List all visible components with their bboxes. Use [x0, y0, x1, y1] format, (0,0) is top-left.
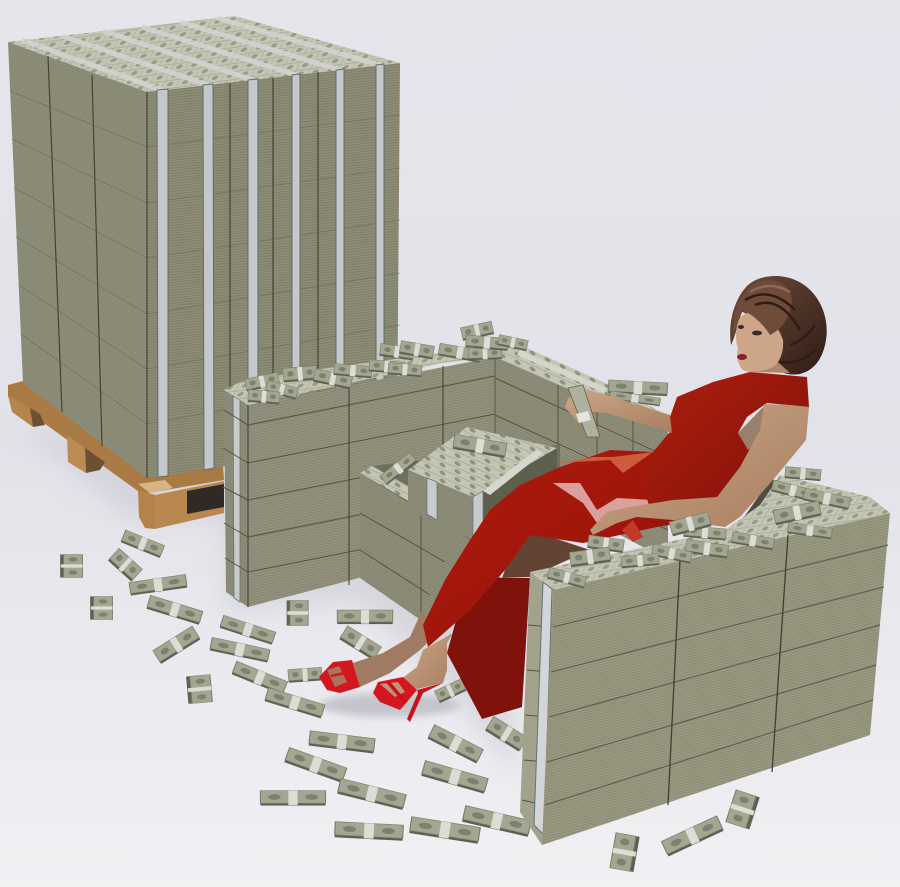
money piles on back wall	[244, 321, 668, 406]
near leg	[400, 633, 453, 690]
wall end face with strap	[224, 390, 248, 607]
torso	[640, 372, 809, 527]
near upper arm and forearm	[590, 404, 809, 535]
cube top	[8, 16, 400, 92]
left chair wall	[223, 345, 672, 607]
shoe shadows	[320, 693, 460, 717]
far arm	[565, 390, 672, 433]
neck	[750, 355, 790, 373]
floor shadows	[20, 425, 520, 780]
cube left face	[8, 42, 147, 478]
wooden pallet	[8, 381, 224, 529]
inner thigh	[502, 530, 590, 578]
woman in red dress	[319, 276, 827, 722]
dress floral lower	[622, 520, 643, 542]
hair front	[733, 280, 792, 335]
cube seams	[10, 91, 400, 424]
wall front face	[248, 357, 495, 607]
dress floral pink	[553, 483, 680, 523]
wall top tiles	[224, 346, 497, 405]
under panel of dress	[447, 570, 530, 719]
right front money block	[520, 475, 890, 845]
cube right face	[147, 63, 400, 478]
floor money: right scatter	[610, 790, 760, 872]
right sandal	[373, 677, 443, 722]
block strap	[534, 582, 552, 835]
block top	[530, 475, 890, 590]
cube straps	[22, 18, 380, 90]
dark gap behind arm	[735, 480, 790, 530]
floor money: lower scatter	[260, 716, 531, 844]
seat block	[360, 427, 560, 630]
hair back	[730, 276, 827, 375]
floor money: centre scatter	[210, 600, 467, 718]
skirt front panel	[423, 420, 740, 647]
big money cube on pallet	[8, 16, 400, 478]
far leg	[353, 608, 430, 687]
block front face	[542, 513, 890, 845]
floor money: upper-left scatter	[60, 530, 212, 704]
block end face	[520, 572, 553, 845]
left sandal	[319, 660, 360, 693]
money stack on seat	[380, 427, 557, 540]
money piles on right block	[547, 467, 851, 588]
back right wall	[495, 357, 668, 560]
armhole skin	[738, 404, 768, 450]
bundle in hand	[568, 385, 600, 437]
dress floral orange	[557, 452, 653, 473]
face	[736, 307, 783, 372]
